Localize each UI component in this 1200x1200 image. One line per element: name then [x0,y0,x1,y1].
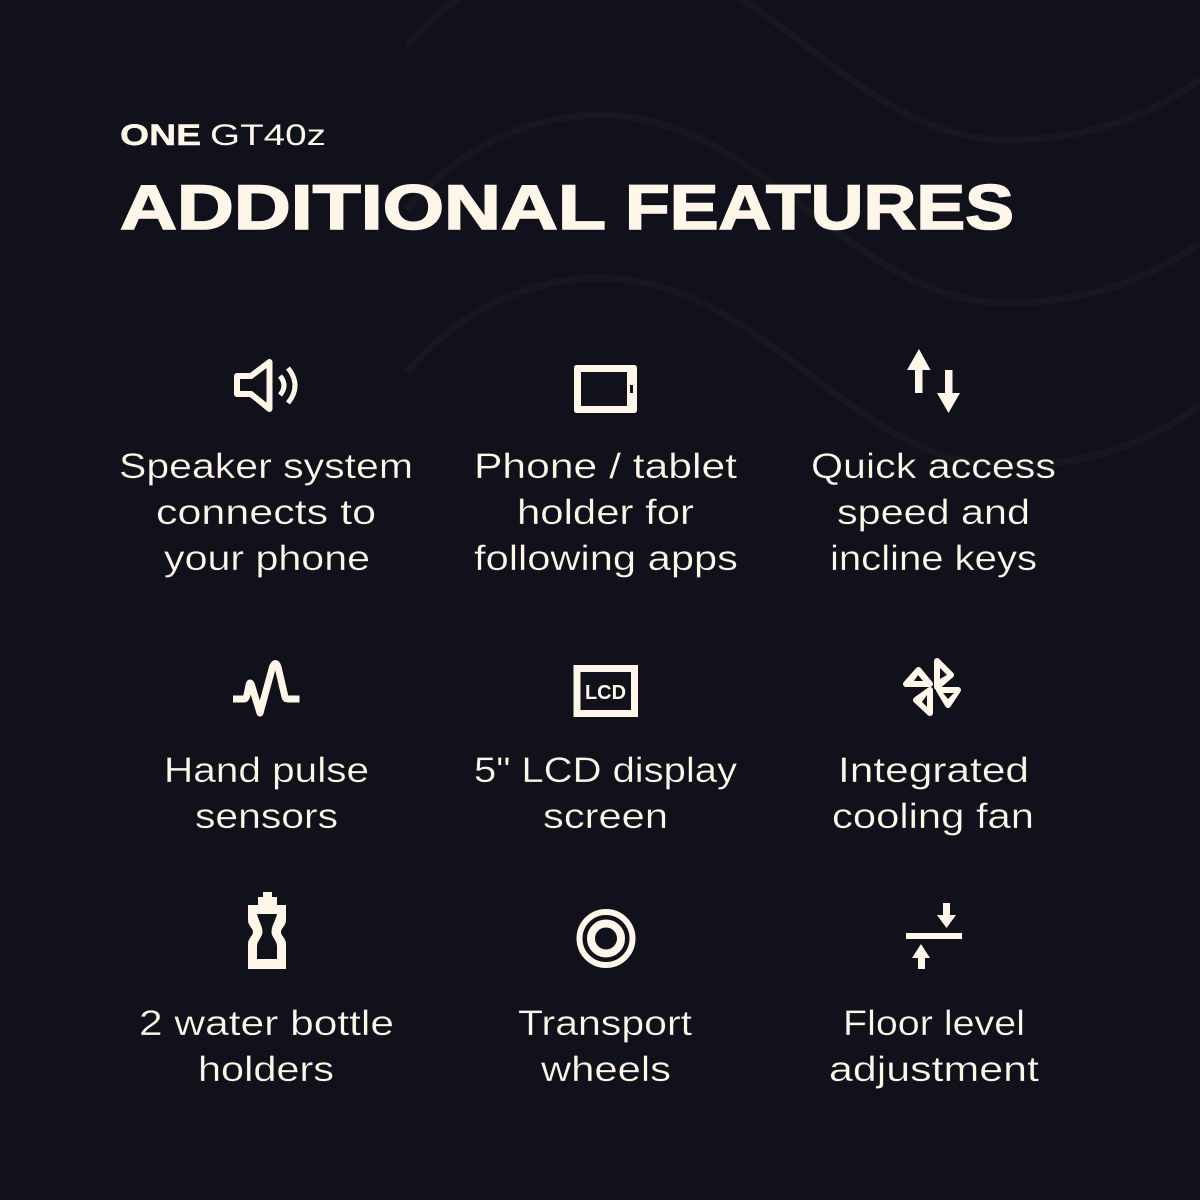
label: quick keys: Quick access [811,447,1056,486]
icon: tablet [574,365,637,413]
label: speaker system: Speaker system [119,447,413,486]
feature: phone holder [474,365,738,578]
label: bottle holders [139,1004,394,1089]
feature: transport wheels [518,912,692,1089]
label: pulse sensors: Hand pulse [164,751,369,790]
label: floor level adjustment [829,1004,1039,1089]
title [120,173,1014,243]
icon: pulse [233,664,300,713]
feature: quick keys [811,349,1056,578]
product name: ONE [120,119,201,152]
label: quick keys: incline keys [830,539,1037,578]
title: ADDITIONAL [120,173,606,243]
label: quick keys: speed and [837,493,1030,532]
feature: LCD display [474,668,738,836]
label: LCD display [474,751,738,836]
label: pulse sensors: sensors [195,797,338,836]
icon: fan [906,661,958,713]
label: LCD display: screen [543,797,668,836]
feature: floor level adjustment [829,903,1039,1089]
icon: speaker [237,362,295,409]
label: cooling fan: cooling fan [832,797,1034,836]
label: cooling fan: Integrated [838,751,1029,790]
icon: LCD screen: LCD [585,682,626,704]
label: floor level adjustment: adjustment [829,1050,1039,1089]
label: bottle holders: holders [198,1050,334,1089]
product name: GT40z [210,119,326,152]
feature: pulse sensors [164,664,369,836]
product name [120,119,326,152]
label: speaker system [119,447,413,578]
label: transport wheels: Transport [518,1004,692,1043]
feature: bottle holders [139,892,394,1089]
label: transport wheels: wheels [540,1050,671,1089]
feature: speaker system [119,362,413,578]
icon: water bottle [248,892,286,969]
icon: wheel [580,912,632,965]
title: FEATURES [625,173,1014,243]
label: phone holder: holder for [517,493,694,532]
label: cooling fan [832,751,1034,836]
label: phone holder [474,447,738,578]
label: phone holder: following apps [474,539,738,578]
icon: level adjustment [906,903,962,969]
label: quick keys [811,447,1056,578]
icon: up and down arrows [907,349,960,413]
label: speaker system: your phone [164,539,370,578]
label: transport wheels [518,1004,692,1089]
label: bottle holders: 2 water bottle [139,1004,394,1043]
icon: LCD screen [577,668,634,714]
feature: cooling fan [832,661,1034,836]
label: LCD display: 5" LCD display [474,751,738,790]
label: pulse sensors [164,751,369,836]
label: speaker system: connects to [156,493,376,532]
label: floor level adjustment: Floor level [843,1004,1025,1043]
label: phone holder: Phone / tablet [474,447,737,486]
